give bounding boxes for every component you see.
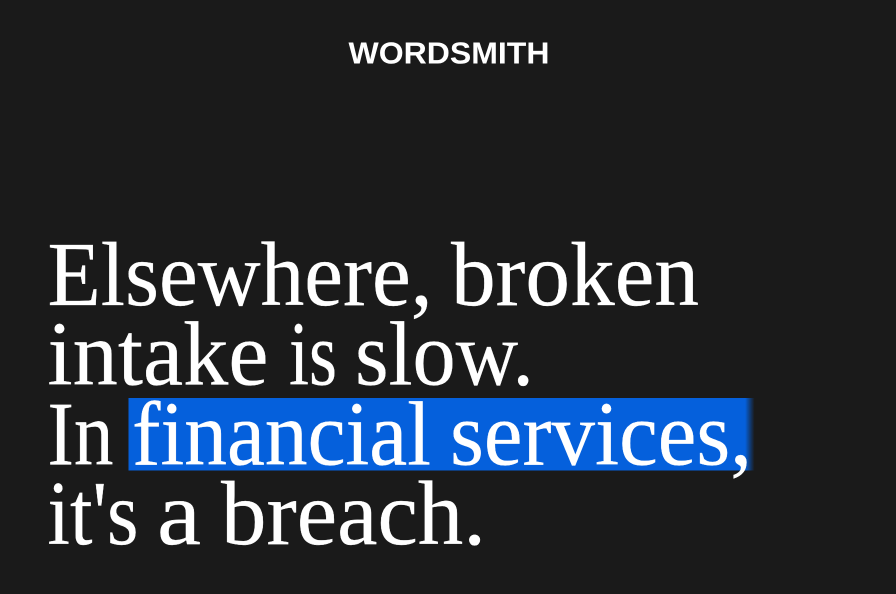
headline line 3: In: In: [48, 384, 114, 484]
headline line 2: [48, 304, 534, 404]
headline line 2: intake: [48, 304, 268, 404]
headline line 4: a: [157, 463, 201, 564]
headline: [48, 224, 754, 564]
headline line 4: [48, 463, 486, 564]
headline line 2: is: [289, 304, 337, 404]
headline line 1: broken: [451, 224, 699, 325]
headline line 4: it's: [48, 463, 138, 564]
headline line 1: [48, 224, 699, 325]
logo: WORDSMITH: WORDSMITH: [348, 36, 550, 70]
highlight bar: [128, 398, 754, 470]
headline line 4: breach.: [221, 463, 486, 564]
headline line 2: slow.: [355, 304, 534, 404]
headline line 1: Elsewhere,: [48, 224, 432, 325]
headline line 3: highlighted phrase: services,: [450, 384, 752, 484]
headline line 3: highlighted phrase: financial: [132, 384, 431, 484]
headline line 3: highlighted phrase: [132, 384, 752, 484]
